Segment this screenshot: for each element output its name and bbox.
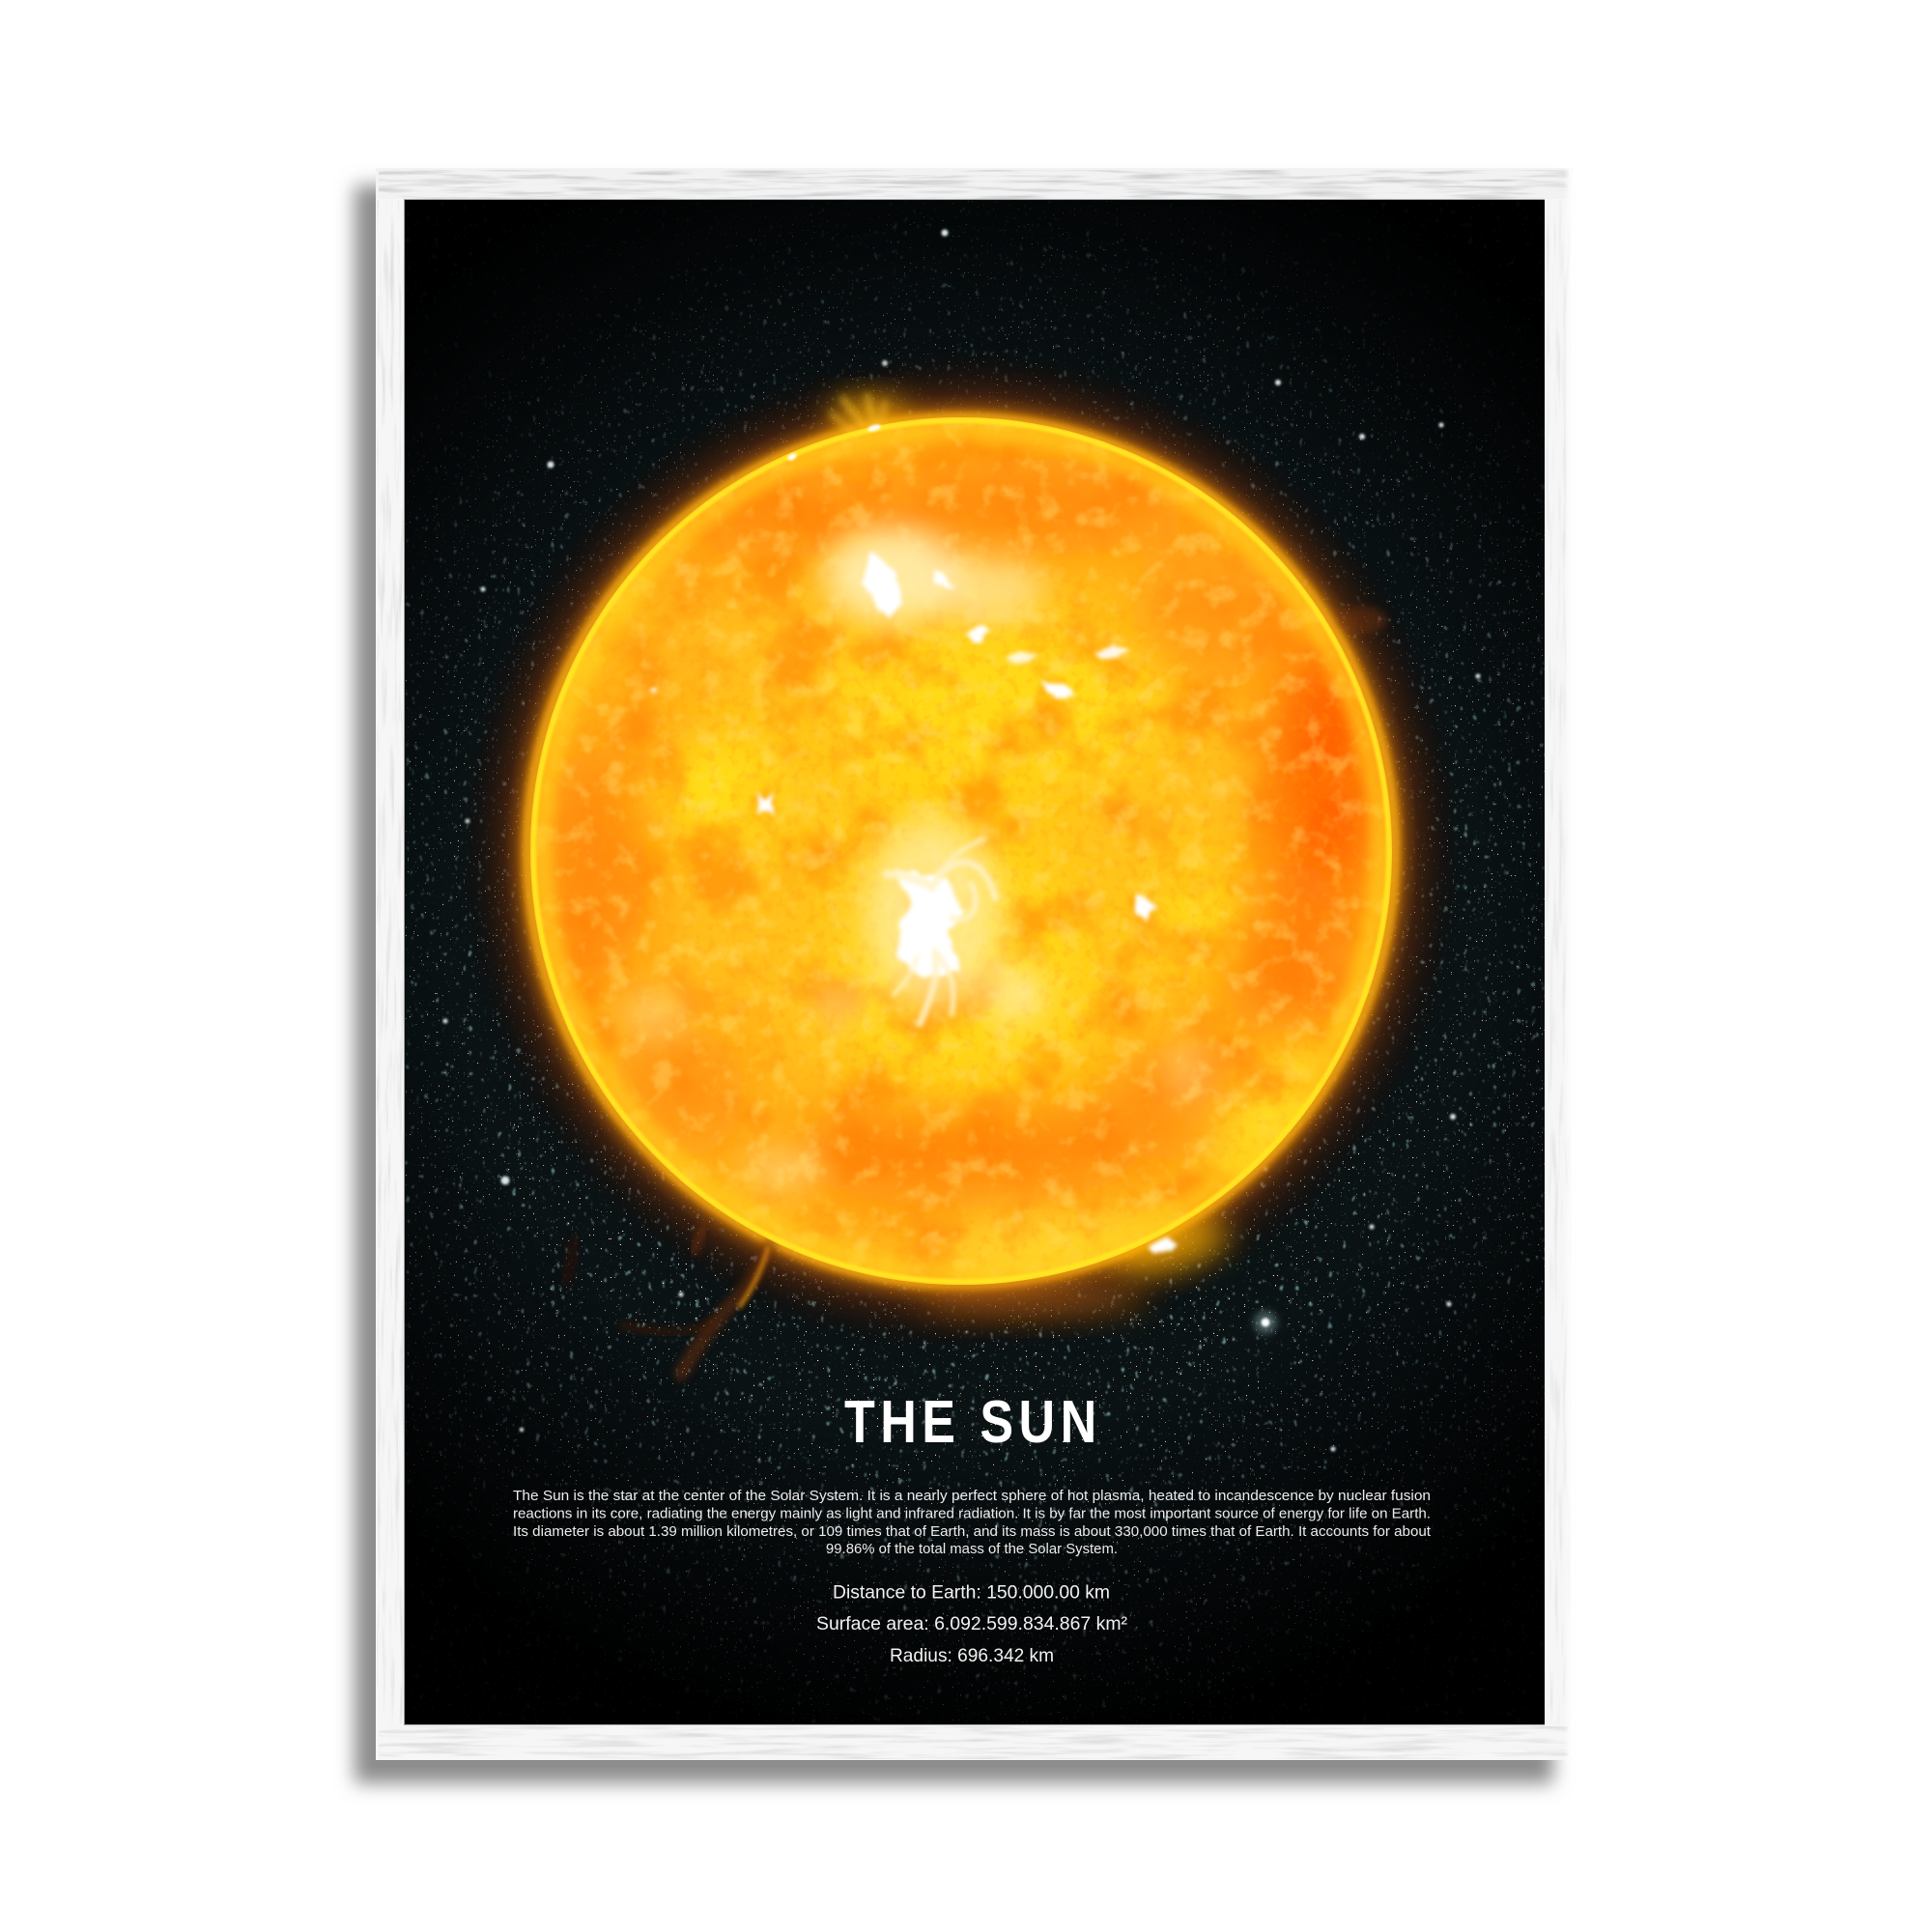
limb bright spots (786, 423, 1180, 1254)
pale patches (622, 526, 1209, 1190)
key facts: Distance to Earth: 150.000.00 km (833, 1582, 1110, 1604)
yellow glow zones (575, 603, 1322, 1277)
central flare (863, 816, 1002, 1024)
flare rays at the top limb (831, 396, 885, 435)
orange zones (538, 459, 1381, 1208)
bright star with glow (1254, 1311, 1277, 1334)
upper flare (863, 551, 989, 641)
corona halo (459, 349, 1463, 1353)
description text block (513, 1489, 1431, 1557)
key facts (816, 1582, 1128, 1666)
the sun (459, 349, 1463, 1374)
description text block: reactions in its core, radiating the energy mainly as light and infrared radiation. It is by far the most important source of energy for life on Earth. (513, 1507, 1431, 1522)
key facts: Surface area: 6.092.599.834.867 km² (816, 1613, 1128, 1634)
small active regions (651, 645, 1157, 923)
title: THE SUN (844, 1389, 1096, 1456)
description text block: 99.86% of the total mass of the Solar System. (826, 1542, 1118, 1557)
plasma mottling (522, 411, 1401, 1292)
description text block: The Sun is the star at the center of the Solar System. It is a nearly perfect sphere of hot plasma, heated to incandescence by nuclear fusion (513, 1489, 1431, 1504)
solar disk surface (520, 411, 1401, 1292)
rim highlight (543, 430, 1379, 1272)
frame shadow (355, 185, 1553, 1783)
bright stars (442, 230, 1480, 1451)
picture frame (376, 164, 1577, 1762)
limb line (533, 420, 1389, 1282)
poster background: starfield (405, 200, 1545, 1724)
prominence at lower left (565, 1229, 769, 1374)
description text block: Its diameter is about 1.39 million kilometres, or 109 times that of Earth, and its mass is about 330,000 times that of Earth. It accounts for about (513, 1524, 1431, 1540)
key facts: Radius: 696.342 km (890, 1645, 1054, 1666)
